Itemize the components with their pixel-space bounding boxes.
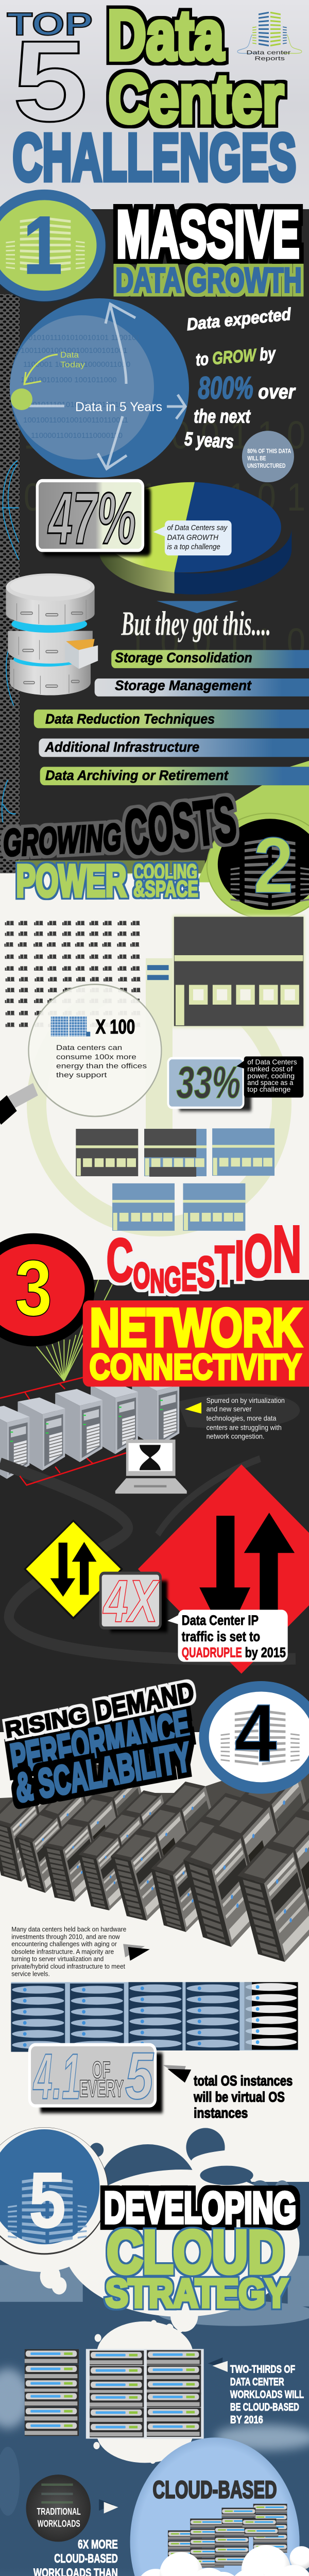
badge: number 1	[0, 190, 107, 302]
bubble: cloud-based: CLOUD-BASED	[153, 2477, 277, 2503]
globe arrows	[29, 304, 185, 469]
background: dark section three	[0, 1280, 309, 1732]
section 4 details	[11, 1926, 298, 2121]
globe label: data today	[11, 351, 85, 410]
background: light section four	[0, 1732, 309, 2247]
cables lower	[2, 780, 16, 822]
heading: power: POWER	[16, 856, 127, 906]
bubble: 80 percent unstructured	[242, 431, 294, 482]
background: silver header	[0, 0, 309, 209]
solution bar: storage consolidation: Storage Consolidation	[115, 650, 252, 666]
bubble: 80 percent unstructured: 80% OF THIS DATA	[247, 448, 291, 455]
callout: quadruple by 2015: traffic is set to	[182, 1629, 260, 1645]
background: metal mesh strip	[0, 294, 20, 873]
stat: x 100: X 100	[96, 1015, 135, 1038]
text: many data centers held back: investments through 2010, and are now	[11, 1934, 120, 1941]
stat box: 4.1 of every 5	[29, 2039, 163, 2113]
server stack: traditional	[25, 2349, 79, 2436]
faint binary backdrop: 0110100101	[24, 475, 305, 519]
icon: office buildings	[51, 1016, 90, 1037]
server row 3	[78, 1790, 175, 1910]
text: total OS instances: will be virtual OS	[193, 2090, 285, 2105]
bubble: traditional workloads: TRADITIONAL	[37, 2506, 81, 2517]
solution bar: storage management: Storage Management	[115, 678, 252, 693]
binary texture on globe: 1100001 100101110000011010	[23, 360, 130, 369]
binary texture on globe: 1001100100100100100101001	[21, 346, 127, 355]
badge: number 5	[0, 2127, 108, 2255]
heading: congestion: T	[215, 1236, 235, 1295]
text: many data centers held back: service levels.	[11, 1971, 50, 1977]
section 2: growing costs	[2, 738, 309, 919]
heading: cooling: COOLING	[134, 860, 197, 884]
logo: data center reports	[237, 12, 302, 62]
green speckle band	[16, 860, 205, 874]
callout: ranked cost: ranked cost of	[247, 1065, 293, 1073]
bubble: cloud-based	[130, 2437, 300, 2576]
text: spurred on by virtualization: network congestion.	[207, 1432, 265, 1440]
icon: large data center building	[173, 916, 304, 1027]
text: total OS instances: instances	[194, 2106, 248, 2121]
callout text: data expected to grow: to GROW by	[195, 343, 277, 369]
sign: red traffic diamond	[138, 1464, 309, 1674]
stat: 5: 5	[125, 2039, 154, 2113]
heading: numeral 5: 5	[13, 18, 88, 146]
text: spurred on by virtualization: and new server	[207, 1405, 252, 1413]
text: 6x more cloud-based workloads: 6X MORE	[78, 2538, 118, 2552]
binary texture on globe: 1001001100100100110110011	[23, 416, 128, 425]
globe label: data today: Data	[60, 351, 79, 360]
binary texture on globe	[15, 333, 141, 440]
binary texture on globe: 10100101110101010 110100101	[15, 400, 128, 409]
binary texture on globe: 1100001100101110000110	[31, 431, 123, 440]
background: dark section one	[0, 209, 309, 873]
heading: and space: &SPACE	[133, 876, 198, 902]
text: data centers can consume: energy than the offices	[56, 1062, 147, 1070]
pictogram: grid of 100 offices	[4, 921, 141, 1027]
heading: costs: COSTS	[122, 784, 239, 868]
pictogram: five disk arrays	[11, 1982, 298, 2052]
server stack in cloud	[168, 2504, 287, 2567]
badge: number 5: 5	[29, 2156, 65, 2244]
text: two-thirds of workloads: TWO-THIRDS OF	[230, 2363, 295, 2376]
text: total OS instances	[193, 2074, 293, 2121]
callout text: data expected to grow: Data expected	[186, 304, 292, 334]
blue blob over cloud	[200, 2166, 253, 2185]
callout text: data expected to grow	[184, 304, 296, 453]
pointer: black arrow	[123, 1944, 150, 1961]
server stack: cloud left	[90, 2351, 144, 2437]
callout: quadruple by 2015	[167, 1610, 288, 1662]
text: spurred on by virtualization: centers are struggling with	[207, 1423, 282, 1432]
text: spurred on by virtualization	[207, 1396, 285, 1440]
section 5: cloud backdrop	[90, 2128, 290, 2235]
heading: demand: DEMAND	[93, 1675, 196, 1727]
network cable lower	[20, 1453, 126, 1485]
callout: quadruple by 2015: QUADRUPLE	[182, 1645, 242, 1660]
pointer: yellow arrow	[185, 1402, 201, 1414]
solution bar: data reduction techniques: Data Reduction Techniques	[45, 711, 215, 727]
callout: ranked cost: power, cooling	[247, 1072, 295, 1080]
section 1 details	[2, 304, 309, 728]
globe label: data in 5 years: Data in 5 Years	[75, 400, 162, 414]
text: two-thirds of workloads	[230, 2363, 304, 2426]
bubble: traditional workloads	[26, 2475, 91, 2541]
stat: 4.1: 4.1	[33, 2041, 81, 2113]
stat: of every	[79, 2057, 124, 2103]
server rows backing	[0, 1752, 309, 1927]
white clouds	[137, 2545, 309, 2576]
server row 5	[151, 1793, 261, 1932]
green swoosh	[197, 761, 309, 883]
heading: and scalability: & SCALABILITY	[13, 1734, 193, 1811]
road swoosh	[177, 1394, 300, 1428]
bubble: 80 percent unstructured: WILL BE	[247, 455, 266, 462]
text: 6x more cloud-based workloads	[20, 2538, 118, 2576]
callout: ranked cost	[236, 1056, 303, 1097]
arrow: down to solutions	[157, 601, 238, 613]
heading: growing: GROWING	[2, 816, 122, 865]
cloud behind servers	[86, 2320, 204, 2464]
section 3: network connectivity	[0, 1128, 309, 1479]
icon: five data center buildings	[76, 1128, 274, 1231]
heading: performance and scalability plate	[8, 1702, 193, 1811]
lighter cloud bands	[0, 2256, 309, 2326]
globe label: data today: Today	[60, 361, 85, 369]
heading: Center: Center	[108, 60, 284, 137]
solution bar: data archiving or retirement	[40, 767, 309, 785]
pointer: arrow to text	[163, 2065, 191, 2082]
server row 4	[111, 1782, 221, 1921]
magnifying glass	[28, 985, 161, 1116]
badge: number 4	[199, 1681, 309, 1794]
text: many data centers held back: private/hybrid cloud infrastructure to meet	[11, 1963, 126, 1970]
text: many data centers held back	[11, 1926, 126, 1977]
heading: congestion: G	[164, 1260, 181, 1300]
soft glow bands	[0, 2368, 309, 2450]
stat box: 4x: 4X	[102, 1567, 160, 1634]
background: blue cloud section	[0, 2182, 309, 2576]
heading: TOP: TOP	[7, 6, 93, 42]
section 2 details	[0, 916, 304, 1117]
text: many data centers held back: turning to server virtualization and	[11, 1956, 104, 1963]
server rack group	[0, 1374, 179, 1479]
callout: of data centers say	[153, 520, 232, 555]
magnifying glass handle	[0, 1089, 36, 1117]
server row 6	[183, 1765, 309, 1947]
sign: yellow traffic diamond	[24, 1520, 123, 1620]
heading: rising: RISING	[4, 1702, 89, 1743]
heading: congestion: N	[150, 1263, 164, 1299]
text: data centers can consume: Data centers can	[56, 1043, 122, 1052]
binary texture on globe: 100100101000 1001011000	[21, 376, 117, 384]
network fan lines	[37, 1280, 112, 1381]
heading: cloud: CLOUD	[107, 2218, 284, 2286]
text: total OS instances: total OS instances	[194, 2074, 293, 2089]
solution bar: data archiving or retirement: Data Archiving or Retirement	[45, 768, 229, 783]
power symbol watermark	[37, 958, 282, 1227]
stat box: 47%: 47%	[47, 478, 136, 560]
stat: of every: EVERY	[79, 2075, 124, 2103]
callout: ranked cost: and space as a	[247, 1079, 293, 1087]
heading: strategy: STRATEGY	[106, 2272, 288, 2316]
section 5 lower	[11, 2504, 309, 2576]
callout: ranked cost: top challenge	[247, 1086, 290, 1093]
callout: quadruple by 2015: Data Center IP	[182, 1613, 259, 1628]
section 3 details	[0, 1439, 309, 1674]
badge: number 3	[0, 1233, 95, 1346]
callout text: data expected to grow: 800%	[198, 370, 253, 405]
faint binary backdrop: 100110	[128, 620, 305, 664]
callout: of data centers say: DATA GROWTH	[167, 533, 218, 541]
section 4 header	[4, 1675, 309, 1811]
solution bar: storage management	[95, 678, 309, 697]
text: data centers can consume: consume 100x more	[56, 1053, 136, 1061]
solution bar: additional infrastructure	[39, 738, 309, 757]
binary texture on globe: 0101011101010010101 1100101	[28, 333, 141, 342]
text: many data centers held back: encountering challenges with aging or	[11, 1941, 117, 1948]
pointer: white arrow	[208, 2358, 228, 2372]
server row far left	[0, 1747, 96, 1882]
text: spurred on by virtualization: technologies, more data	[207, 1414, 277, 1422]
section 1: header and massive data growth	[0, 0, 302, 302]
logo: data center reports: Data center	[246, 50, 291, 56]
bubble: traditional workloads: WORKLOADS	[38, 2518, 80, 2529]
heading plate: network connectivity	[83, 1298, 309, 1387]
solution bar: data reduction techniques	[34, 709, 309, 728]
callout: of data centers say: is a top challenge	[167, 543, 220, 551]
solution bar: storage consolidation	[111, 650, 309, 668]
callout: of data centers say: of Data Centers say	[167, 523, 228, 532]
equals sign	[147, 965, 169, 980]
badge: number 2: 2	[253, 821, 294, 910]
white cloud backing	[0, 2149, 309, 2332]
background: light section two	[0, 873, 309, 1280]
icon: storage database	[6, 573, 98, 696]
section 5: developing cloud strategy	[0, 2127, 309, 2576]
faint binary backdrop	[24, 413, 305, 664]
heading: congestion: E	[181, 1255, 197, 1299]
server row 7	[237, 1781, 309, 1962]
text: 6x more cloud-based workloads: CLOUD-BASED	[54, 2552, 118, 2566]
logo: data center reports: Reports	[254, 56, 285, 62]
faint binary backdrop: 1010100110	[24, 413, 305, 457]
section 4: server rows	[0, 1747, 309, 1962]
text: many data centers held back: obsolete infrastructure. A majority are	[11, 1948, 114, 1956]
callout text: data expected to grow: over	[258, 380, 296, 403]
server stack: cloud right	[147, 2350, 201, 2437]
callout: ranked cost: of Data Centers	[247, 1058, 297, 1066]
stat: of every: OF	[92, 2057, 110, 2083]
stat box: 33%: 33%	[176, 1058, 241, 1108]
callout text: data expected to grow: 5 years	[184, 428, 234, 453]
heading: congestion: S	[197, 1247, 215, 1296]
pointer: arrow to cloud based	[99, 2499, 118, 2514]
road swoosh right	[158, 1459, 260, 1535]
text: many data centers held back: Many data centers held back on hardware	[11, 1926, 126, 1933]
callout: quadruple by 2015: by 2015	[245, 1645, 286, 1660]
icon: laptop with hourglass	[115, 1439, 187, 1494]
text: data centers can consume: they support	[56, 1071, 107, 1079]
text: two-thirds of workloads: DATA CENTER	[230, 2376, 284, 2388]
chart: data growth globe	[10, 298, 189, 478]
badge: number 3: 3	[15, 1244, 52, 1332]
pie chart: 47 percent	[98, 482, 291, 595]
badge: number 2	[207, 814, 309, 919]
bubble: 80 percent unstructured: UNSTRUCTURED	[247, 463, 285, 469]
heading: performance: PERFORMANCE	[8, 1702, 192, 1782]
heading: congestion: C	[107, 1226, 133, 1294]
cables	[2, 461, 19, 706]
network cabling	[0, 1378, 83, 1399]
road swoosh lower	[0, 1463, 296, 1659]
server row 1	[15, 1762, 120, 1893]
heading: congestion: O	[133, 1256, 150, 1296]
text: two-thirds of workloads: BY 2016	[230, 2414, 263, 2426]
badge: number 1: 1	[23, 200, 62, 291]
text: spurred on by virtualization: Spurred on by virtualization	[207, 1396, 285, 1404]
callout text: data expected to grow: the next	[194, 405, 251, 427]
faint cloud left	[0, 2447, 20, 2516]
heading: congestion: I	[235, 1229, 244, 1292]
server row 2	[43, 1771, 149, 1902]
solution bar: additional infrastructure: Additional Infrastructure	[44, 739, 199, 755]
heading: congestion: O	[244, 1222, 272, 1289]
badge: number 4: 4	[234, 1687, 277, 1779]
text: data centers can consume	[56, 1043, 147, 1079]
